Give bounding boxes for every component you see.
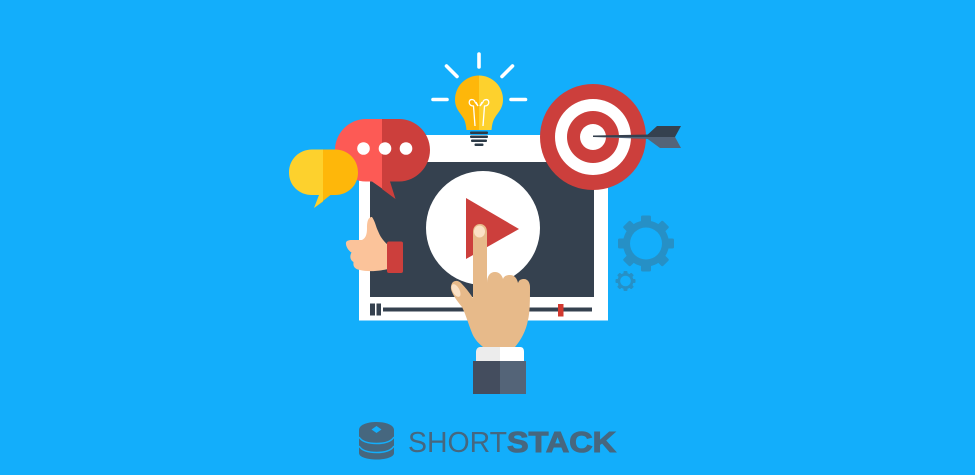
video player frame — [359, 135, 608, 320]
gear icons — [616, 216, 674, 291]
logo wordmark: SHORT — [408, 427, 507, 459]
shirt cuff — [476, 347, 524, 361]
progress marker — [558, 304, 564, 316]
logo: ShortStack: STACK — [507, 427, 616, 459]
video screen — [370, 162, 594, 297]
pause button — [370, 304, 381, 316]
icon: pointing hand — [450, 224, 530, 347]
icon: target with dart — [540, 84, 681, 190]
icon: red speech bubble — [335, 119, 430, 199]
logo: ShortStack — [359, 422, 616, 460]
icon: stack logo — [359, 422, 394, 460]
jacket sleeve — [473, 361, 526, 394]
icon: thumbs up hand — [346, 217, 403, 273]
play button — [426, 171, 540, 285]
progress bar — [383, 308, 592, 312]
icon: yellow speech bubble — [289, 150, 358, 208]
icon: light bulb — [433, 54, 526, 146]
